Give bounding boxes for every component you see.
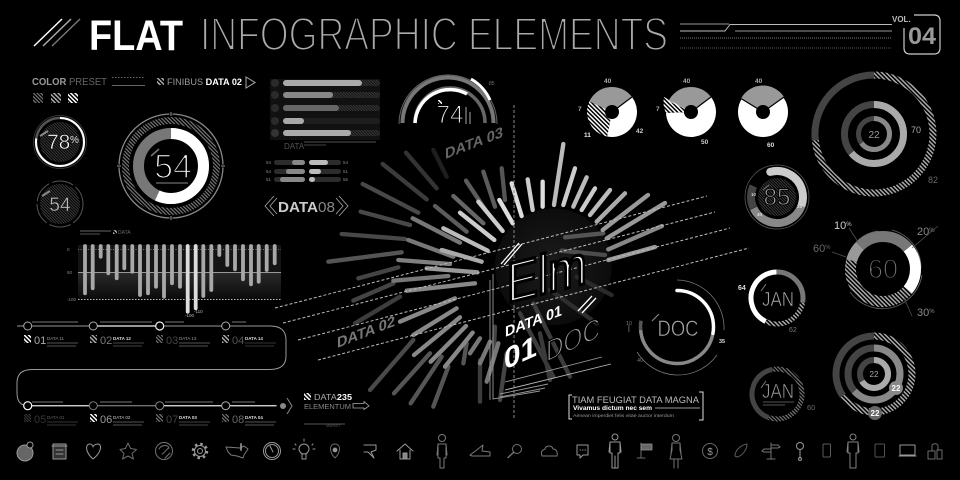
pie chart: 40 42 11 7: 42 <box>636 128 644 135</box>
gauge: 74 semicircle: 74 <box>436 101 464 129</box>
chart legend: DATA <box>118 230 131 236</box>
icon: woman in skirt <box>670 434 682 468</box>
icon: gear <box>193 444 207 458</box>
step 05: 05 <box>34 414 46 426</box>
doc label: DOC <box>546 311 600 369</box>
chart axis labels: -110 <box>194 309 203 314</box>
label: finibus data 02 <box>157 77 255 88</box>
timeline end arrow <box>280 398 292 414</box>
gauge: 74 semicircle: 85 <box>489 81 495 87</box>
icon: lock buildings <box>928 444 942 459</box>
step 03: 03 <box>166 335 178 347</box>
step 02: 02 <box>100 335 112 347</box>
step 03: DATA 13 <box>179 336 197 341</box>
gauge: 78 percent <box>34 116 86 168</box>
icon: house <box>397 444 413 459</box>
timeline nodes <box>24 322 230 410</box>
title: INFOGRAPHIC ELEMENTS: INFOGRAPHIC ELEMENTS <box>200 8 668 60</box>
icon row <box>17 434 942 468</box>
gauge: JAN with 60: 60 <box>807 403 815 412</box>
concentric rings: 22 70 82: 82 <box>928 175 938 185</box>
pie chart: 40 42 11 7: 11 <box>584 132 591 139</box>
gauge: 54 small <box>37 181 83 227</box>
text block: tiam feugiat: Vivamus dictum nec sem <box>573 405 652 412</box>
bar row 2 <box>271 91 380 99</box>
donut callouts: 60 <box>813 243 825 255</box>
bar row 4 <box>271 117 380 125</box>
title: FLAT: FLAT <box>89 12 183 60</box>
step 04 <box>222 335 276 347</box>
pie chart: 40 50 7: 50 <box>701 139 709 146</box>
mirrored mini bars: 51 <box>266 177 272 182</box>
icon: cloud <box>541 446 557 456</box>
gauge: 74 semicircle <box>399 75 497 129</box>
timeline: steps 01 to 08 <box>17 322 292 426</box>
frame lines <box>490 274 611 400</box>
concentric rings: 22 70 82 <box>815 75 938 193</box>
donut callouts: % <box>846 222 852 228</box>
step 05 <box>24 414 78 426</box>
icon: title slashes <box>34 19 80 46</box>
mirrored mini bars: 51 <box>343 169 349 174</box>
concentric rings: 22 22 22 <box>836 336 912 420</box>
pie chart: 40 50 7: 40 <box>683 78 691 85</box>
gauge: DOC: 40 <box>637 358 643 364</box>
bar list caption: DATA <box>284 142 305 151</box>
icon: usa map <box>226 444 248 458</box>
label: data 08 <box>265 196 348 216</box>
pie chart: 40 60: 40 <box>755 78 763 85</box>
pie chart: 40 50 7: 7 <box>656 106 660 113</box>
volume badge: 04 <box>908 23 937 50</box>
donut callouts: 30 <box>917 307 929 319</box>
icon: dollar coin: $ <box>707 447 713 458</box>
gauge: JAN with 60: JAN <box>762 381 794 403</box>
step 07: DATA 03 <box>179 415 197 420</box>
pie chart: 40 42 11 7: 7 <box>578 106 582 113</box>
icon: map pin <box>330 444 340 458</box>
label: finibus data 02: FINIBUS DATA 02 <box>167 77 242 87</box>
icon: store <box>52 444 67 459</box>
concentric rings: 22 22 22: 22 <box>870 370 879 379</box>
header rules <box>680 24 892 48</box>
ring badges <box>868 381 903 420</box>
step 06 <box>90 414 144 426</box>
donut callouts: % <box>929 309 935 315</box>
gauge: 78 percent: 78 <box>47 131 70 154</box>
chart: radial burst <box>328 144 665 407</box>
chart axis labels: -100 <box>185 313 195 318</box>
gauge: 85: 35 <box>797 204 803 209</box>
icon: phone <box>823 444 830 457</box>
icon: woman <box>437 434 447 468</box>
donut callouts: 10 <box>834 220 846 232</box>
icon: ribbon <box>364 445 376 458</box>
gauge: DOC <box>626 280 725 375</box>
step 07: 07 <box>166 414 178 426</box>
icon: magnifier <box>508 444 522 458</box>
gauge: JAN with 64 62 <box>738 263 812 334</box>
gauge: DOC: DOC <box>658 316 699 341</box>
step 01: DATA 11 <box>47 336 65 341</box>
icon: earth <box>156 442 172 460</box>
chart axis labels: -100 <box>67 297 77 302</box>
pie chart: 40 42 11 7: 40 <box>604 78 612 85</box>
step 05: DATA 01 <box>47 415 65 420</box>
step 02 <box>90 335 144 347</box>
mirrored mini bars: 54 <box>266 160 272 165</box>
burst bright rays <box>400 144 665 382</box>
label: data235 elementum: DATA235 <box>314 392 352 402</box>
step 04: DATA 14 <box>245 336 263 341</box>
chart legend <box>80 230 131 236</box>
01 label: 01 <box>504 329 537 377</box>
volume badge: VOL. <box>892 15 911 24</box>
bar row 5 <box>271 129 380 137</box>
mirrored mini bars: 54 <box>266 169 272 174</box>
heading: color preset: COLOR PRESET <box>32 77 107 88</box>
burst dim rays <box>328 150 612 407</box>
text block: tiam feugiat <box>569 392 703 420</box>
dashed guide lines <box>275 105 749 420</box>
mirrored mini bars: 56 <box>343 177 349 182</box>
slash marks <box>501 243 596 313</box>
icon: tablet <box>875 444 884 457</box>
pie chart: 40 60 <box>738 78 788 149</box>
donut callouts: 20 <box>917 226 929 238</box>
gauge: DOC: 35 <box>719 339 725 345</box>
chart axis labels: 0 <box>67 247 70 252</box>
concentric rings: 22 70 82: 22 <box>868 130 880 141</box>
icon: man <box>847 434 859 468</box>
data 01 label: DATA 01 <box>505 302 562 341</box>
step 08: DATA 04 <box>245 415 263 420</box>
text block: tiam feugiat: TIAM FEUGIAT DATA MAGNA <box>572 395 700 406</box>
step 01: 01 <box>34 335 46 347</box>
gauge: JAN with 64 62: 64 <box>738 285 746 292</box>
gauge: JAN with 60 <box>745 362 815 426</box>
preset rules <box>112 78 145 86</box>
Elm word: Elm <box>507 234 587 316</box>
icon: hand <box>470 445 490 456</box>
gauge: 85: 40 <box>757 212 763 217</box>
icon: light bulb <box>293 439 315 459</box>
volume badge <box>892 15 940 54</box>
gauge: 54 small: 54 <box>49 195 71 216</box>
bar chart: data <box>67 230 281 318</box>
bar list panel <box>270 79 380 151</box>
step 03 <box>156 335 210 347</box>
icon: man with cap <box>609 434 621 468</box>
step 08: 08 <box>232 414 244 426</box>
highlighted track segments <box>28 326 276 406</box>
label: data235 elementum: MARKET <box>326 424 341 428</box>
step 06: DATA 02 <box>113 415 131 420</box>
center lockup: Elm data 01 <box>490 234 611 400</box>
donut: 60 percent with callouts: 60 <box>868 254 898 284</box>
step 08 <box>222 414 276 426</box>
step 04: 04 <box>232 335 244 347</box>
header: title row <box>34 8 940 60</box>
icon: star <box>120 443 136 459</box>
step 06: 06 <box>100 414 112 426</box>
icon: key <box>796 442 804 460</box>
panel: color preset <box>32 77 145 103</box>
label: data235 elementum: ELEMENTUM <box>304 404 351 411</box>
mirrored mini bars: 54 <box>343 160 349 165</box>
step 01 <box>24 335 78 347</box>
gauge: DOC: 10 <box>626 321 632 327</box>
label: data 08: DATA08 <box>278 199 335 216</box>
concentric rings: 22 70 82: 70 <box>911 125 921 135</box>
ring badges: 22 <box>871 409 880 418</box>
donut callouts: % <box>825 245 831 251</box>
icon: globe pin <box>17 442 33 461</box>
icon: laptop <box>899 445 916 456</box>
preset swatches <box>33 93 78 103</box>
gauge: 85 <box>742 162 812 232</box>
icon: clock <box>264 442 280 460</box>
icon: rocket <box>735 444 747 457</box>
gauge: 85: 10 <box>751 192 757 197</box>
donut callouts: % <box>929 228 935 234</box>
gauge: JAN with 64 62: JAN <box>762 289 794 311</box>
icon: flag <box>637 443 652 458</box>
timeline track <box>17 326 286 406</box>
timeline upper rules <box>32 322 255 402</box>
icon: dollar coin <box>702 444 718 458</box>
gauge: 78 percent: % <box>70 135 79 146</box>
pie chart: 40 60: 60 <box>767 142 775 149</box>
bar row 3 <box>271 104 380 112</box>
donut callouts <box>813 220 935 319</box>
mirrored mini bars <box>266 160 349 182</box>
pie chart: 40 42 11 7 <box>578 78 644 139</box>
label: data 03: DATA 03 <box>445 124 503 163</box>
step 07 <box>156 414 210 426</box>
donut: 60 percent with callouts <box>813 220 938 319</box>
ring badges: 22 <box>892 384 901 393</box>
text block: tiam feugiat: Aenean imperdiet felis vitae auctor interdum <box>573 413 674 418</box>
chart axis labels: 50 <box>67 270 73 275</box>
icon: heart <box>87 444 101 459</box>
gauge: 54 large donut: 54 <box>154 148 192 186</box>
label: data235 elementum <box>304 392 369 428</box>
gauge: 85: 85 <box>764 184 790 211</box>
bar row 1 <box>271 79 380 87</box>
icon: signpost <box>762 443 780 459</box>
pie chart: 40 50 7 <box>656 78 716 146</box>
gauge: JAN with 64 62: 62 <box>789 327 797 334</box>
gauge: 54 large donut <box>116 111 226 221</box>
chart axis labels <box>67 247 203 318</box>
label: data 02: DATA 02 <box>337 313 395 352</box>
step 02: DATA 12 <box>113 336 131 341</box>
icon: chat <box>577 445 588 458</box>
